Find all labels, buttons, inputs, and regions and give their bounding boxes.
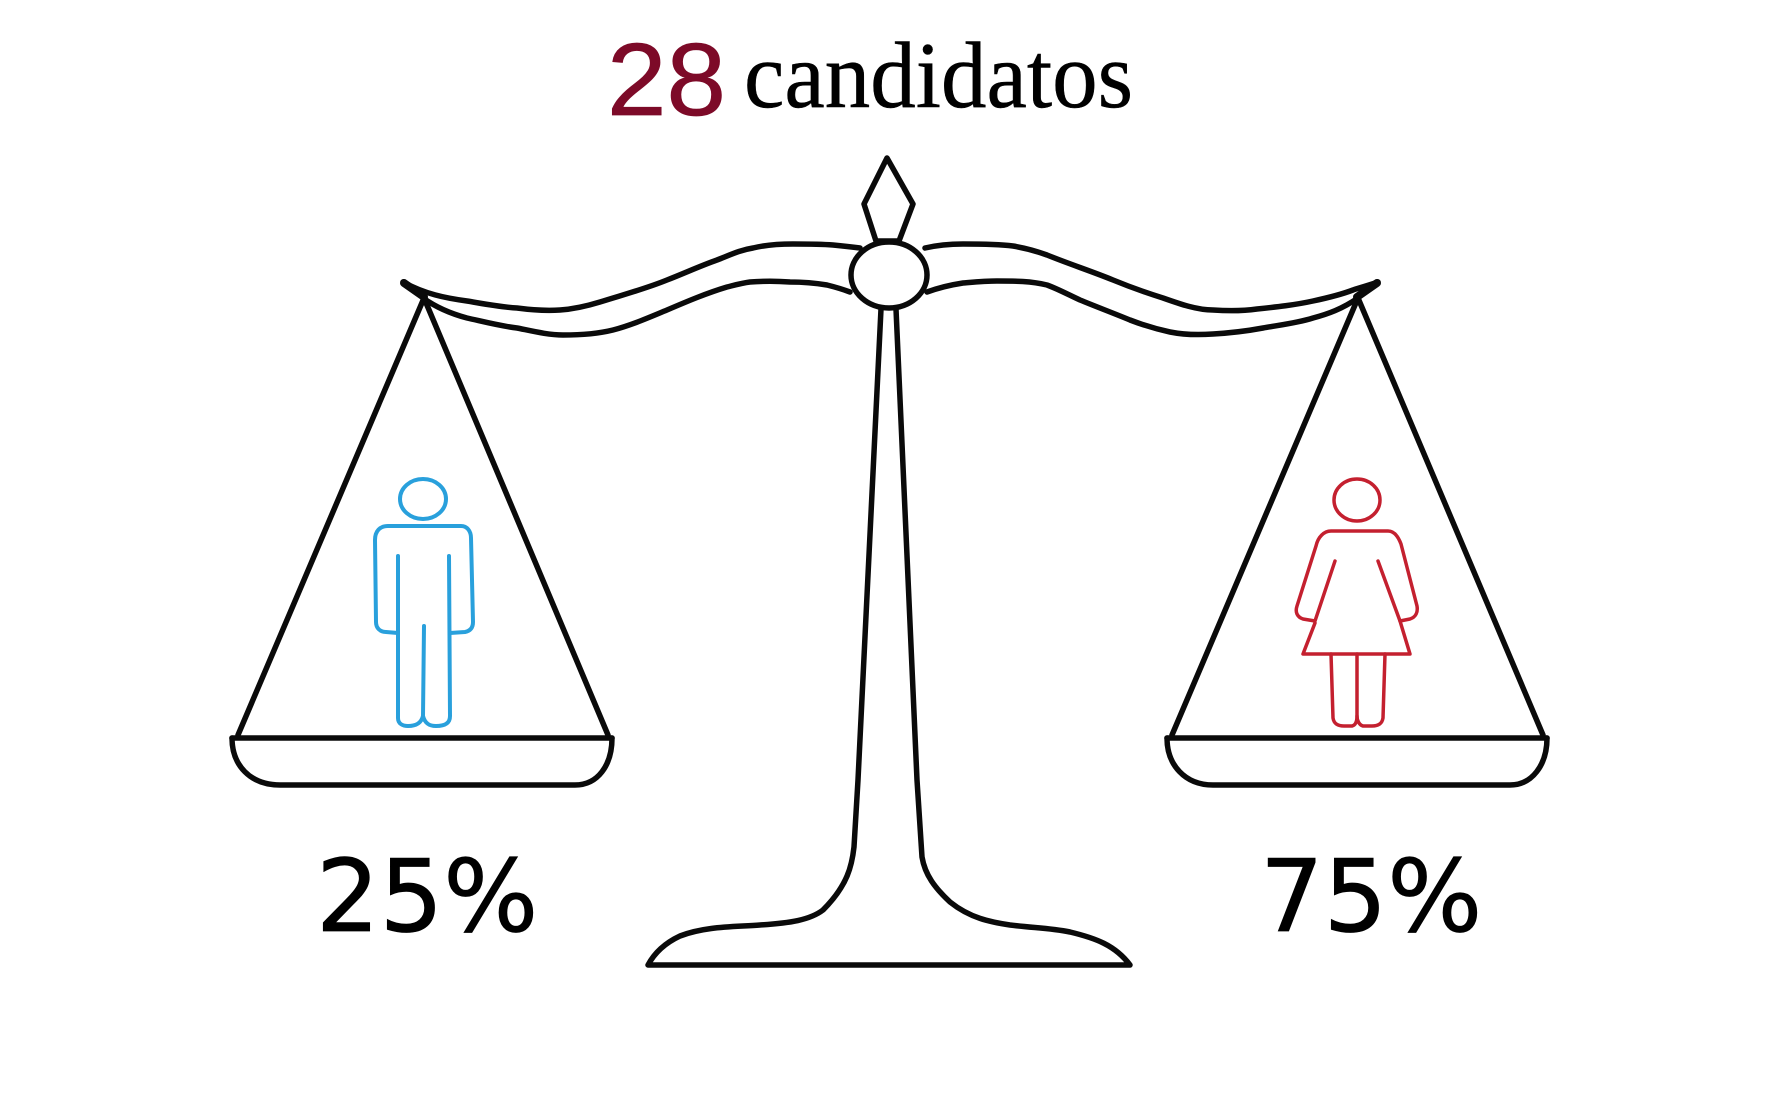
title word: candidatos xyxy=(744,24,1133,128)
scale stand xyxy=(648,309,1130,965)
icon: woman xyxy=(1296,479,1417,726)
scale finial xyxy=(864,158,913,241)
scale beam xyxy=(403,244,1378,335)
label: men percentage: 25% xyxy=(316,838,538,955)
title number: 28 xyxy=(607,22,726,137)
right pan xyxy=(1167,298,1547,785)
balance scale xyxy=(232,158,1547,965)
title xyxy=(607,22,1133,137)
scale pivot xyxy=(851,242,927,308)
left pan xyxy=(232,298,612,785)
icon: man xyxy=(375,479,473,726)
label: women percentage: 75% xyxy=(1260,838,1482,955)
